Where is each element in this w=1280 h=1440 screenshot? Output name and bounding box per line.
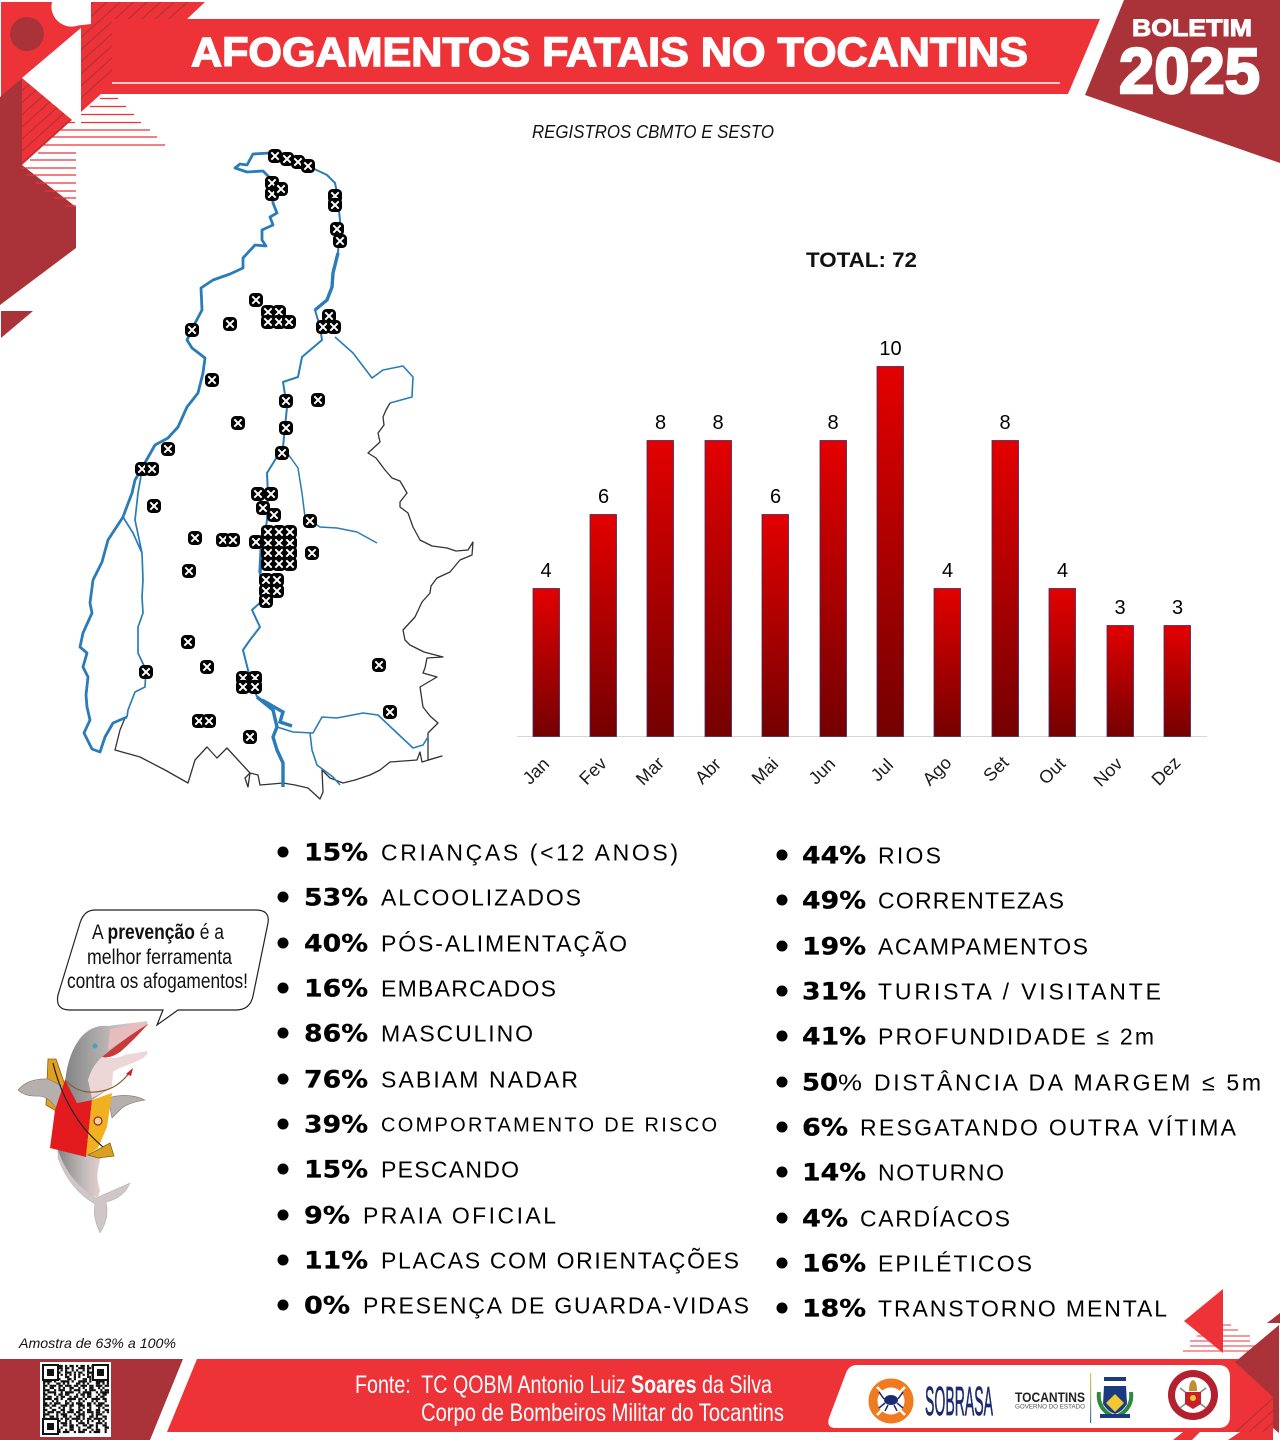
statistics list: right column: CARDÍACOS [860, 1206, 1010, 1232]
bar: Out [1035, 560, 1076, 788]
footer left block with QR code [0, 1359, 183, 1440]
statistics list: right column: 49% [802, 886, 866, 914]
logo: fire brigade seal [1168, 1370, 1218, 1420]
bar: Dez: 3 [1172, 597, 1183, 619]
statistics list: right column: TRANSTORNO MENTAL [878, 1296, 1167, 1322]
QR code [40, 1362, 111, 1437]
speech bubble: A prevenção é a [92, 921, 224, 944]
bar: Dez: Dez [1148, 753, 1184, 789]
bar: Dez [1148, 597, 1190, 789]
bar: Jul: Jul [867, 755, 897, 785]
white logos panel [828, 1365, 1230, 1428]
statistics list: right column: 6% [802, 1114, 848, 1142]
bar: Jun: 8 [827, 412, 839, 434]
bar: Set: 8 [999, 412, 1011, 434]
statistics list: left column: 40% [304, 930, 368, 958]
rescue float back [46, 1059, 65, 1112]
life vest [50, 1063, 114, 1158]
bar: Mar [632, 412, 674, 789]
statistics list: left column: 16% [304, 974, 368, 1002]
statistics list: left column: PRAIA OFICIAL [363, 1202, 556, 1228]
bar: Out: Out [1035, 754, 1069, 788]
statistics list: right column: 16% [802, 1250, 866, 1278]
bar: Jan: 4 [540, 560, 552, 582]
speech bubble: melhor ferramenta [87, 946, 232, 969]
title: AFOGAMENTOS FATAIS NO TOCANTINS [191, 29, 1028, 75]
statistics list: left column: MASCULINO [381, 1020, 533, 1046]
statistics list: right column: % [838, 1070, 862, 1096]
bar: Mar: 8 [655, 412, 666, 434]
bar: Abr: Abr [691, 754, 725, 788]
bar: Mai: Mai [748, 754, 782, 788]
statistics list: right column: 31% [802, 978, 866, 1006]
bar: Mai [748, 486, 788, 788]
statistics list: right column: 18% [802, 1294, 866, 1322]
bar: Jul: 10 [879, 338, 902, 360]
statistics list: right column: ACAMPAMENTOS [878, 934, 1088, 960]
bar: Fev: Fev [575, 753, 611, 789]
statistics list: right column [776, 842, 1261, 1322]
bar: Nov: 3 [1114, 597, 1126, 619]
bar: Mai: 6 [770, 486, 781, 508]
rivers [80, 153, 277, 752]
bar: Mar: Mar [632, 753, 668, 789]
footer red bar with source text: Corpo de Bombeiros Militar do Tocantins [421, 1399, 784, 1427]
statistics list: left column: 76% [304, 1066, 368, 1094]
statistics list: left column: ALCOOLIZADOS [381, 884, 581, 910]
subtitle: REGISTROS CBMTO E SESTO [532, 122, 774, 142]
boletim 2025 badge: 2025 [1119, 35, 1260, 107]
source text: Fonte: TC QOBM Antonio Luiz Soares da Silva [355, 1371, 772, 1399]
boletim 2025 badge [1085, 0, 1280, 163]
logo: Tocantins government: GOVERNO DO ESTADO [1015, 1404, 1085, 1410]
statistics list: left column: 39% [304, 1110, 368, 1138]
statistics list: right column: RESGATANDO OUTRA VÍTIMA [860, 1114, 1237, 1140]
state border [115, 403, 473, 799]
sample note: Amostra de 63% a 100% [18, 1335, 176, 1351]
statistics list: left column: 9% [304, 1202, 350, 1230]
bar: Jan: Jan [519, 754, 553, 788]
statistics list: right column: DISTÂNCIA DA MARGEM ≤ 5m [874, 1070, 1261, 1096]
decoration: top-left geometric shapes [0, 2, 205, 338]
bar: Abr [691, 412, 732, 788]
bar: Nov: Nov [1090, 754, 1126, 790]
header banner [112, 19, 1100, 94]
map of Tocantins with drowning markers [80, 149, 473, 799]
statistics list: left column: COMPORTAMENTO DE RISCO [381, 1114, 717, 1136]
bar: Out: 4 [1057, 560, 1068, 582]
bar: Jan [519, 560, 560, 788]
statistics list: right column: CORRENTEZAS [878, 888, 1064, 914]
bar: Ago [919, 560, 960, 789]
statistics list: right column: 4% [802, 1204, 848, 1232]
head and torso [65, 1021, 148, 1103]
bar: Nov [1090, 597, 1134, 790]
whistle cord [65, 1072, 130, 1092]
fins [18, 1079, 66, 1112]
tail [58, 1150, 130, 1233]
statistics list: left column: CRIANÇAS (<12 ANOS) [381, 840, 678, 866]
bar: Fev [575, 486, 616, 789]
statistics list: left column: 0% [304, 1292, 350, 1320]
bar: Ago: Ago [919, 753, 955, 789]
speech bubble: contra os afogamentos! [67, 970, 248, 993]
logo: SOBRASA lifebuoy [873, 1383, 909, 1419]
bar: Jun: Jun [805, 754, 839, 788]
statistics list: left column: 11% [304, 1246, 368, 1274]
speech bubble [58, 910, 268, 1025]
boletim 2025 badge: BOLETIM [1132, 15, 1252, 42]
statistics list: right column: RIOS [878, 842, 941, 868]
white logos panel: SOBRASA [925, 1378, 993, 1424]
statistics list: left column: 15% [304, 838, 368, 866]
statistics list: right column: PROFUNDIDADE ≤ 2m [878, 1024, 1154, 1050]
statistics list: right column: NOTURNO [878, 1160, 1004, 1186]
bar: Ago: 4 [942, 560, 953, 582]
chart total label: TOTAL: 72 [806, 249, 917, 272]
statistics list: left column [278, 838, 749, 1320]
mascot: dolphin lifeguard [18, 1021, 148, 1233]
statistics list: right column: EPILÉTICOS [878, 1250, 1032, 1276]
statistics list: right column: 19% [802, 932, 866, 960]
incident markers [135, 149, 397, 744]
bar: Set: Set [979, 752, 1013, 786]
statistics list: left column: 86% [304, 1020, 368, 1048]
bar: Set [979, 412, 1018, 786]
statistics list: left column: PRESENÇA DE GUARDA-VIDAS [363, 1292, 749, 1318]
statistics list: right column: 44% [802, 842, 866, 870]
statistics list: right column: 14% [802, 1158, 866, 1186]
statistics list: left column: 53% [304, 884, 368, 912]
statistics list: right column: TURISTA / VISITANTE [878, 978, 1161, 1004]
statistics list: left column: PÓS-ALIMENTAÇÃO [381, 930, 627, 956]
logo: Tocantins government [1015, 1373, 1091, 1423]
decoration: lower-right triangle and lines [1183, 1289, 1280, 1353]
bar: Jul [867, 338, 904, 785]
bar: Jun [805, 412, 846, 788]
statistics list: left column: 15% [304, 1156, 368, 1184]
footer red bar with source text [167, 1359, 1273, 1432]
bar chart: monthly fatalities [517, 338, 1207, 790]
statistics list: left column: PESCANDO [381, 1156, 519, 1182]
statistics list: right column: 50 [802, 1068, 838, 1096]
statistics list: left column: EMBARCADOS [381, 976, 556, 1002]
decoration: lower-right dark shapes [1173, 1325, 1279, 1440]
statistics list: left column: PLACAS COM ORIENTAÇÕES [381, 1246, 739, 1274]
bar: Abr: 8 [712, 412, 724, 434]
statistics list: left column: SABIAM NADAR [381, 1066, 578, 1092]
statistics list: right column: 41% [802, 1022, 866, 1050]
bar: Fev: 6 [598, 486, 609, 508]
logo: Tocantins coat of arms [1099, 1377, 1131, 1418]
logo: Tocantins government: TOCANTINS [1015, 1389, 1085, 1405]
